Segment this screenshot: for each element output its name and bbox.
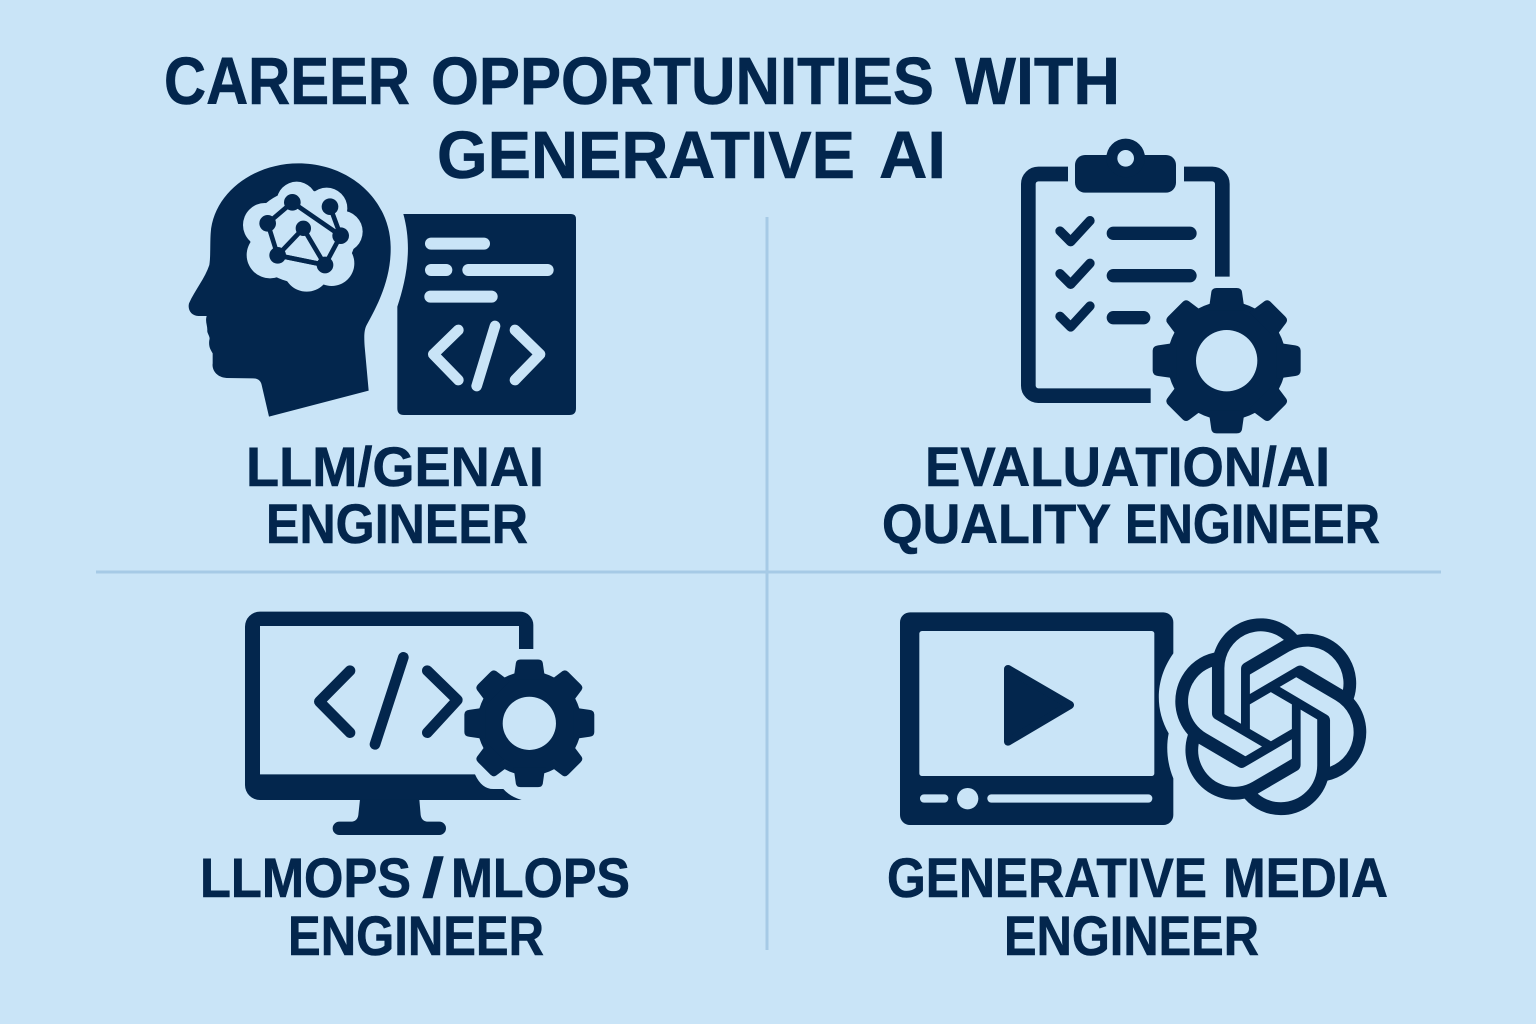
label: LLMOps/MLOps engineer: / [422, 846, 445, 909]
label: LLMOps/MLOps engineer: LLMOPS [200, 846, 411, 909]
label: LLM/GenAI engineer: LLM/GENAI [246, 435, 544, 498]
title: OPPORTUNITIES [431, 44, 934, 119]
icon: video player [900, 612, 1173, 825]
panel: LLMOps/MLOps engineer [200, 612, 630, 967]
label: Generative media engineer [887, 846, 1388, 967]
label: LLM/GenAI engineer: ENGINEER [266, 492, 528, 555]
title: AI [879, 118, 946, 193]
label: Generative media engineer: ENGINEER [1004, 904, 1259, 967]
panel: Evaluation/AI quality engineer [882, 139, 1380, 555]
label: Evaluation/AI quality engineer: ENGINEER [1125, 492, 1380, 555]
icon: head with neural network brain [189, 163, 391, 417]
label: Generative media engineer: GENERATIVE [887, 846, 1207, 909]
icon: monitor with code and gear [245, 612, 594, 835]
label: LLMOps/MLOps engineer: ENGINEER [288, 904, 544, 967]
label: LLMOps/MLOps engineer [200, 846, 630, 967]
title: CAREER [164, 44, 410, 119]
label: LLM/GenAI engineer [246, 435, 544, 555]
label: Evaluation/AI quality engineer: QUALITY [882, 492, 1111, 555]
label: LLMOps/MLOps engineer: MLOPS [451, 846, 630, 909]
label: Generative media engineer: MEDIA [1223, 846, 1388, 909]
icon: knot logo [1175, 618, 1366, 815]
label: Evaluation/AI quality engineer [882, 435, 1380, 555]
panel: Generative media engineer [887, 612, 1388, 967]
icon: code document [397, 214, 576, 415]
title [164, 44, 1120, 193]
label: Evaluation/AI quality engineer: EVALUATION/AI [925, 435, 1330, 498]
title: GENERATIVE [437, 118, 855, 193]
panel: LLM/GenAI engineer [189, 163, 576, 555]
title: WITH [955, 44, 1120, 119]
icon: clipboard checklist with gear [1028, 139, 1301, 433]
